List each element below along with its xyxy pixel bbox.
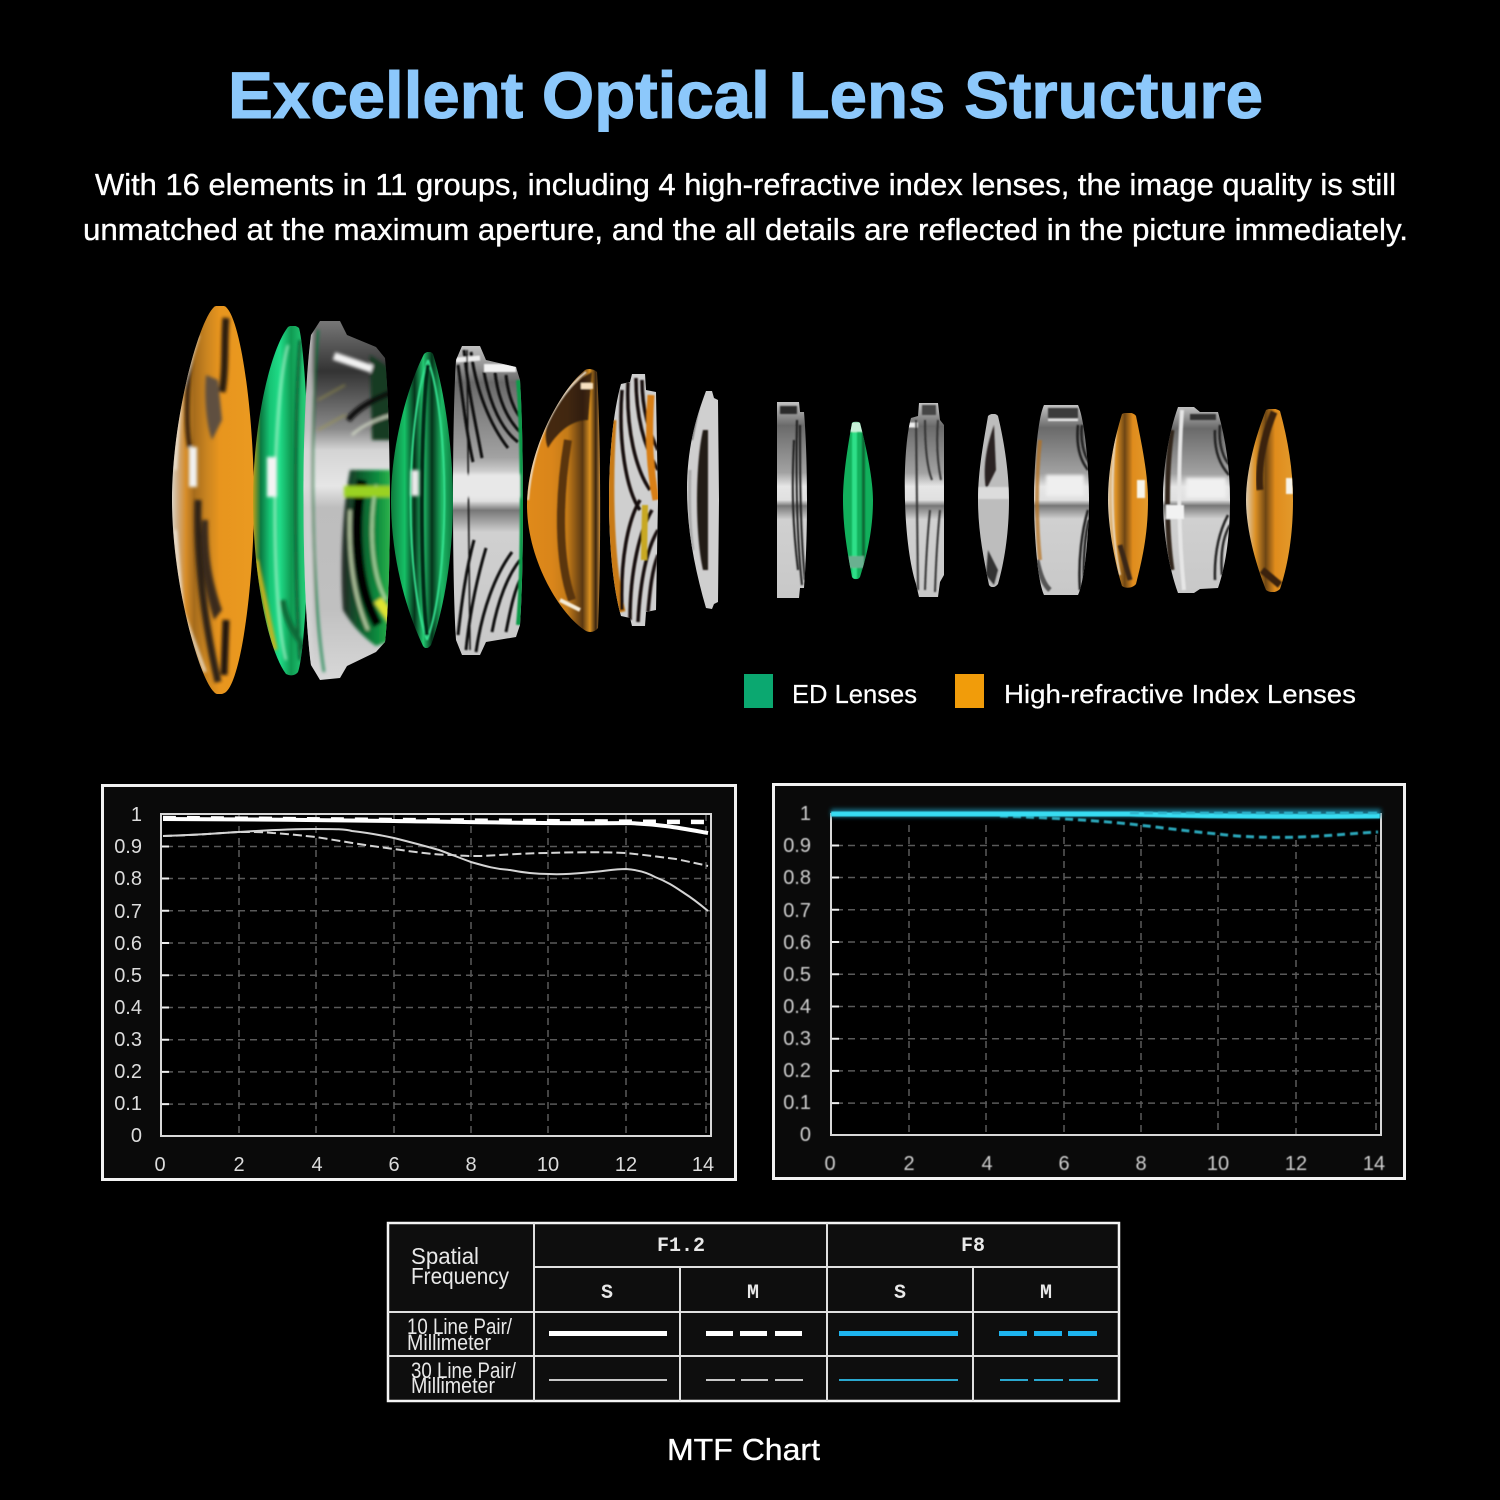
lens 10: small green ED [843,422,873,579]
y axis labels: 0.2 [114,1061,142,1083]
table header: spatial frequency [411,1243,509,1289]
y axis labels: 0.1 [114,1093,142,1115]
row label: 10 line pair: Millimeter [407,1330,491,1355]
table header: spatial frequency: Spatial [411,1243,479,1269]
lens 12: clear biconvex [978,414,1009,587]
row label: 10 line pair [407,1314,513,1355]
y axis labels: 0.3 [783,1028,811,1050]
y axis labels: 0.7 [114,901,142,923]
table header: apertures and orientations: F8 [961,1235,985,1258]
table header: apertures and orientations: M [747,1282,759,1305]
table header: apertures and orientations [601,1235,1052,1305]
line samples: 10 line pair [549,1331,1097,1336]
lens 6: orange plano-convex [527,369,601,632]
curve: 10 lp/mm meridional F8 [1130,812,1381,814]
curve glow F8 [831,809,1381,817]
x axis labels: 4 [311,1154,323,1176]
y axis labels: 1 [800,803,811,825]
intro text [83,167,1408,247]
x axis labels: 8 [1135,1153,1147,1175]
curve: 10 and 30 lp/mm sagittal F8 [831,814,1380,816]
table header: apertures and orientations: S [894,1282,906,1305]
y axis labels: 0.6 [783,932,811,954]
row label: 30 line pair [411,1358,517,1398]
lens 1: orange high-refractive [172,306,254,694]
y axis labels: 0.2 [783,1060,811,1082]
row label: 10 line pair: 10 Line Pair/ [407,1314,513,1339]
y axis labels: 0.5 [783,964,811,986]
x axis labels: 10 [1207,1153,1229,1175]
exploded lens diagram [172,306,1293,694]
x axis labels: 4 [981,1153,993,1175]
y axis labels [114,804,142,1147]
legend swatch: high-refractive lenses [955,674,984,708]
row label: 30 line pair: Millimeter [411,1373,495,1398]
curve: 10 lp/mm meridional [163,818,708,822]
x axis labels: 6 [1058,1153,1070,1175]
x axis labels: 14 [692,1154,714,1176]
curve: 30 lp/mm sagittal [163,829,708,911]
lens 11: clear doublet [904,403,944,597]
chart: MTF at F1.2 [102,786,736,1180]
x axis labels: 2 [903,1153,915,1175]
y axis labels: 0.9 [783,835,811,857]
y axis labels: 0.4 [783,996,811,1018]
y axis labels: 0.7 [783,900,811,922]
table header: spatial frequency: Frequency [411,1263,509,1289]
caption: MTF chart: MTF Chart [667,1432,820,1467]
curve: 10 lp/mm sagittal [163,819,708,833]
table header: apertures and orientations: F1.2 [657,1235,705,1258]
curve: 30 lp/mm meridional [163,832,708,866]
x axis labels: 12 [1285,1153,1307,1175]
lens 2: green ED [253,326,309,676]
x axis labels [824,1153,1385,1175]
lens 4: green ED biconvex [391,352,453,648]
legend table: spatial frequency [388,1223,1119,1401]
x axis labels: 0 [824,1153,836,1175]
title: Excellent Optical Lens Structure [228,58,1263,132]
x axis labels: 2 [233,1154,245,1176]
y axis labels: 1 [131,804,142,826]
x axis labels: 10 [537,1154,559,1176]
x axis labels: 14 [1363,1153,1385,1175]
y axis labels: 0 [131,1125,142,1147]
intro text: With 16 elements in 11 groups, including 4 high-refractive index lenses, the image quality is still [95,167,1396,202]
x axis labels: 6 [388,1154,400,1176]
y axis labels: 0.8 [114,868,142,890]
lens 14: small orange [1108,413,1148,588]
line samples: 30 line pair [549,1379,1098,1381]
lens 13: clear thick element [1034,405,1089,595]
lens 7: striped clear and orange [606,374,658,626]
y axis labels: 0.8 [783,867,811,889]
y axis labels: 0 [800,1124,811,1146]
y axis labels: 0.9 [114,836,142,858]
legend label: high-refractive lenses: High-refractive Index Lenses [1004,679,1356,709]
intro text: unmatched at the maximum aperture, and the all details are reflected in the picture immediately. [83,212,1408,247]
x axis labels: 0 [154,1154,166,1176]
y axis labels: 0.1 [783,1092,811,1114]
table header: apertures and orientations: M [1040,1282,1052,1305]
lens 3: clear stepped element with green rear [300,321,392,680]
y axis labels: 0.6 [114,933,142,955]
x axis labels [154,1154,714,1176]
legend swatch: ED lenses [744,674,773,708]
chart: MTF at F8 [774,784,1404,1178]
lens 5: clear stepped with swirls [452,345,524,657]
x axis labels: 8 [465,1154,477,1176]
y axis labels: 0.5 [114,965,142,987]
table header: apertures and orientations: S [601,1282,613,1305]
lens 15: clear doublet [1163,406,1230,594]
legend label: ED lenses: ED Lenses [792,679,917,709]
lens 9: clear plano element [777,402,809,598]
curve: 30 lp/mm meridional F8 [1000,816,1378,837]
y axis labels [783,803,811,1146]
lens 8: clear meniscus [687,391,719,609]
y axis labels: 0.3 [114,1029,142,1051]
row label: 30 line pair: 30 Line Pair/ [411,1358,517,1383]
lens 16: orange rear element [1246,409,1293,592]
x axis labels: 12 [615,1154,637,1176]
legend [744,674,1356,709]
y axis labels: 0.4 [114,997,142,1019]
